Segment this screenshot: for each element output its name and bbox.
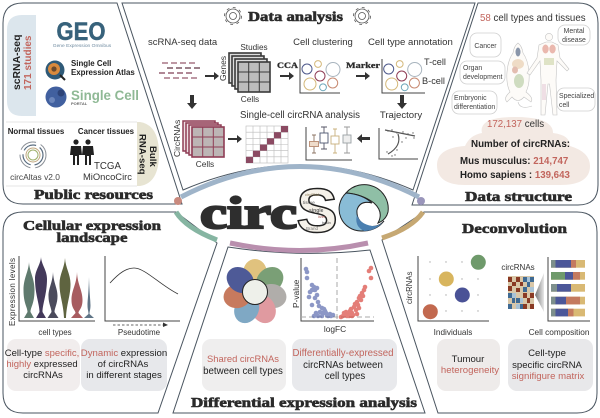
cancer tissues: MiOncoCirc [83, 171, 132, 182]
logo letter S: circRNA [305, 192, 320, 197]
callout: cell-type specific: highly expressed [6, 359, 78, 370]
callout: shared circRNAs [202, 339, 286, 391]
cell composition bars [529, 257, 590, 337]
logo: Single Cell Portal: PORTAL [71, 101, 88, 106]
icon: circAltas rings [20, 142, 46, 168]
arc: tan right [382, 212, 423, 238]
icon: gear right [354, 8, 370, 24]
arrow down [397, 95, 407, 109]
logo: Single Cell Expression Atlas: Single Cell [71, 59, 111, 68]
logo: circSC: circ [200, 187, 297, 238]
illustration: human [527, 33, 569, 115]
callout: dynamic expression [81, 339, 167, 391]
callout: differentially-expressed: circRNAs between [303, 360, 383, 371]
tissue bubbles [452, 25, 595, 114]
callout: cell-type specific: Cell-type specific, [5, 348, 79, 359]
marker arrow: Marker [346, 60, 380, 70]
tissue bubbles: Embryonic [454, 95, 487, 102]
scRNA-seq band [7, 15, 36, 116]
scRNA-seq reads [148, 37, 218, 78]
callout: shared circRNAs: Shared circRNAs [207, 353, 279, 364]
dot plot: Individuals [434, 328, 472, 337]
circRNA x cell matrix stack: CircRNAs [172, 120, 182, 157]
callout: signature matrix: specific circRNA [512, 360, 583, 371]
callout: shared circRNAs: between cell types [203, 366, 283, 377]
heading: Cellular expression [23, 218, 162, 233]
CCA arrow [277, 60, 299, 80]
trajectory plot: Trajectory [380, 110, 422, 121]
signature heatmap: circRNAs [501, 263, 535, 272]
cloud: circRNA counts: Mus musculus: 214,747 [460, 156, 568, 167]
pseudotime line chart [105, 256, 180, 337]
callout: differentially-expressed [292, 339, 397, 391]
panel: data structure [412, 3, 598, 205]
logo letter S: brain [322, 220, 331, 225]
icon: gear left [224, 8, 242, 24]
callout: signature matrix: Cell-type [528, 348, 566, 359]
heading: Differential expression analysis [191, 395, 417, 410]
cell clustering plot: Cell clustering [293, 37, 353, 48]
callout: differentially-expressed: Differentially-expressed [292, 348, 394, 359]
callout: signature matrix: signifigure matrix [512, 371, 584, 382]
tissue bubbles: Cancer [474, 43, 497, 50]
arrow [205, 72, 219, 80]
cloud: circRNA counts: Homo sapiens : 139,643 [460, 170, 570, 181]
logo letter S: liver [318, 214, 326, 219]
tissue bubbles: Organ [463, 65, 482, 72]
callout: tumour heterogeneity [437, 339, 500, 391]
arc: green left [176, 212, 217, 240]
logo: Single Cell Expression Atlas: Expression Atlas [71, 68, 135, 77]
logo: Single Cell Portal: Single Cell [71, 87, 139, 103]
cell type annotation plot [368, 37, 453, 93]
node: purple [417, 197, 425, 205]
signature heatmap [501, 263, 535, 309]
arrow [228, 135, 242, 143]
cancer tissues: Cancer tissues [78, 127, 135, 136]
diagonal matrix [246, 126, 288, 163]
volcano plot: P-value [291, 279, 301, 308]
callout: tumour heterogeneity: heterogeneity [441, 365, 499, 376]
scRNA-seq band: scRNA-seq [12, 35, 23, 90]
circRNA x cell matrix stack: Cells [196, 159, 214, 169]
heading: Public resources [34, 187, 153, 202]
single-cell circRNA analysis label: Single-cell circRNA analysis [240, 110, 360, 121]
heading: Data analysis [248, 10, 344, 25]
tissue bubbles: differentiation [454, 104, 495, 111]
arc: blue top [181, 166, 419, 197]
panel: cellular expression landscape [3, 212, 217, 413]
callout: tumour heterogeneity: Tumour [452, 354, 485, 365]
CCA arrow: CCA [277, 60, 299, 70]
logo letter C: wave [339, 185, 388, 231]
arrow left [357, 134, 370, 143]
callout: cell-type specific [5, 339, 80, 391]
cancer tissues: TCGA [94, 161, 121, 172]
normal tissues [8, 127, 65, 182]
bulk RNA-seq band: Bulk [147, 146, 158, 167]
logo letter S: tissue [303, 200, 315, 205]
volcano plot [291, 258, 374, 334]
panel: deconvolution [382, 212, 597, 413]
logo letter S: single [309, 208, 324, 214]
circRNA x cell matrix stack [172, 120, 224, 169]
heading: Deconvolution [462, 222, 567, 237]
node: terracotta [174, 197, 182, 205]
box plot [306, 127, 352, 160]
tissue bubbles: Specialized [559, 93, 594, 100]
illustration: mouse [506, 43, 532, 107]
gene x cell matrix stack: Genes [218, 56, 228, 81]
gene x cell matrix stack [218, 43, 270, 104]
tissue bubbles: cell [559, 102, 570, 109]
logo: GEO: GEO [56, 18, 106, 46]
normal tissues: Normal tissues [8, 127, 65, 136]
volcano plot: logFC [324, 324, 346, 334]
scRNA-seq reads: scRNA-seq data [148, 37, 218, 48]
arrow down [187, 95, 197, 109]
logo: Single Cell Expression Atlas [46, 59, 135, 80]
heading: landscape [56, 230, 128, 245]
cell type annotation plot: B-cell [422, 76, 445, 86]
icon: people [70, 139, 94, 165]
funnel shape [535, 273, 544, 312]
trajectory plot [379, 110, 422, 159]
arc: mauve bottom [230, 243, 368, 250]
tissue bubbles: development [463, 74, 503, 81]
callout: cell-type specific: circRNAs [23, 370, 63, 381]
panel: public resources [3, 3, 182, 204]
pseudotime line chart: Pseudotime [118, 328, 161, 337]
cell clustering plot [293, 37, 353, 93]
tissue bubbles: disease [562, 37, 586, 44]
flower diagram [221, 259, 289, 327]
cell composition bars: Cell composition [529, 327, 590, 337]
cell type annotation plot: Cell type annotation [368, 37, 453, 48]
logo: circSC [200, 177, 388, 246]
gene x cell matrix stack: Studies [240, 43, 268, 52]
violin plot: cell types [38, 328, 72, 337]
cell types heading: 58 cell types and tissues [480, 13, 586, 24]
violin plot: Expression levels [8, 258, 17, 326]
logo letter S: S [296, 177, 338, 246]
dot plot [405, 255, 489, 337]
normal tissues: circAltas v2.0 [10, 172, 60, 182]
logo letter S: Brand [306, 226, 319, 231]
callout: dynamic expression: Dynamic expression [81, 348, 167, 359]
cloud: circRNA counts: 172,137 cells [487, 119, 544, 130]
heading: Data structure [465, 189, 572, 204]
bulk RNA-seq band: RNA-seq [136, 134, 148, 175]
logo: Single Cell Portal [46, 86, 139, 108]
callout: differentially-expressed: cell types [325, 371, 365, 382]
cell type annotation plot: T-cell [424, 57, 446, 67]
tissue bubbles: Mental [564, 28, 585, 35]
panel: differential expression analysis [173, 247, 425, 413]
callout: signature matrix [508, 339, 593, 391]
dot plot: circRNAs [405, 271, 414, 304]
bulk RNA-seq band [6, 122, 159, 186]
heading [23, 218, 162, 245]
cloud: circRNA counts: Number of circRNAs: [471, 139, 570, 150]
callout: dynamic expression: in different stages [86, 370, 162, 381]
callout: dynamic expression: of circRNAs [98, 359, 149, 370]
violin plot [8, 256, 95, 337]
cloud: circRNA counts [437, 117, 590, 185]
scRNA-seq band: 171 studies [23, 35, 34, 90]
logo: GEO: Gene Expression Omnibus [53, 43, 112, 49]
gene x cell matrix stack: Cells [241, 94, 259, 104]
marker arrow [346, 60, 380, 80]
cancer tissues [70, 127, 135, 182]
